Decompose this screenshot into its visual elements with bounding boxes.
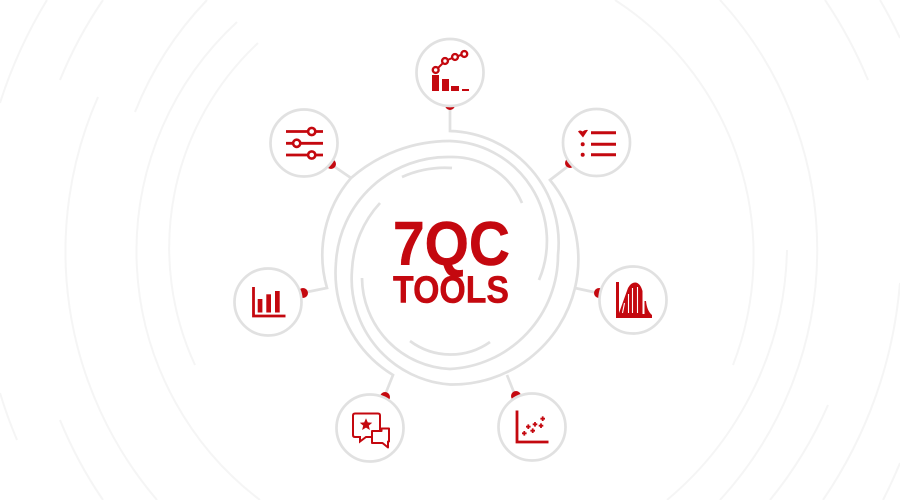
node: sliders — [270, 110, 338, 176]
title: 7QC TOOLS — [393, 210, 510, 312]
node: pareto chart — [416, 39, 484, 110]
title: 7QC TOOLS: 7QC — [393, 210, 510, 279]
node: chat bubbles with star — [336, 392, 404, 462]
node: histogram curve — [594, 266, 666, 334]
node: checklist — [563, 109, 630, 176]
node: bar chart — [234, 268, 308, 336]
central ring maze — [302, 108, 598, 395]
title: 7QC TOOLS: TOOLS — [393, 270, 509, 312]
node: scatter plot — [498, 391, 566, 460]
